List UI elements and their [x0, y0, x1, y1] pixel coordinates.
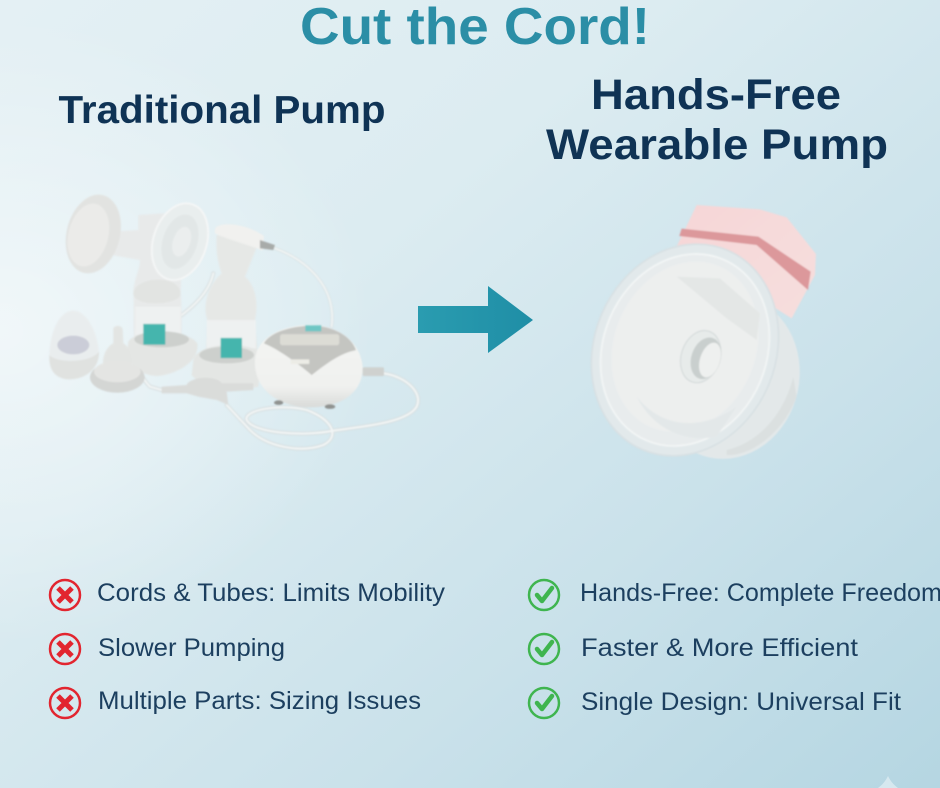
pink motor body: [677, 205, 816, 318]
flange: [559, 215, 811, 485]
left flange: [58, 189, 129, 279]
inner detail: [677, 277, 760, 340]
heading: wearable pump: [546, 71, 888, 169]
illustration: traditional pump kit: [49, 189, 418, 449]
clear flange: [142, 196, 217, 287]
nipple: [103, 326, 132, 367]
illustration: wearable pump: [559, 205, 816, 485]
icon: red cross 2: [50, 634, 80, 664]
list: wearable pump benefits: [529, 579, 940, 718]
bottle cap: [49, 311, 99, 379]
heading: wearable pump: Hands-Free: [591, 71, 841, 119]
motor unit: [255, 325, 363, 407]
text: slower pumping: Slower Pumping: [98, 634, 285, 662]
icon: green check 3: [529, 688, 559, 718]
collection cup: [638, 281, 815, 473]
text: cords and tubes: Cords & Tubes: Limits Mobility: [97, 579, 446, 607]
icon: green check 2: [529, 634, 559, 664]
teal label right: [221, 338, 242, 358]
heading: wearable pump: Wearable Pump: [546, 121, 888, 169]
right bottle: [205, 235, 258, 350]
text: single design: Single Design: Universal Fit: [581, 688, 901, 716]
text: faster: Faster & More Efficient: [581, 634, 858, 662]
text: multiple parts: Multiple Parts: Sizing Issues: [98, 687, 421, 715]
arrow: [418, 286, 533, 353]
connector: [162, 378, 253, 405]
left base: [128, 332, 198, 376]
teal label left: [143, 324, 165, 345]
left bottle: [112, 213, 182, 337]
tubing: [138, 248, 418, 449]
heading: traditional pump: Traditional Pump: [58, 89, 386, 132]
decorative sparkle: [878, 776, 898, 788]
right base: [192, 345, 262, 389]
icon: red cross 3: [50, 688, 80, 718]
pink band: [679, 229, 811, 290]
list: traditional pump drawbacks: [50, 579, 446, 718]
icon: red cross 1: [50, 580, 80, 610]
nipple tunnel: [674, 325, 727, 388]
text: hands-free: Hands-Free: Complete Freedom: [580, 579, 940, 607]
icon: green check 1: [529, 580, 559, 610]
